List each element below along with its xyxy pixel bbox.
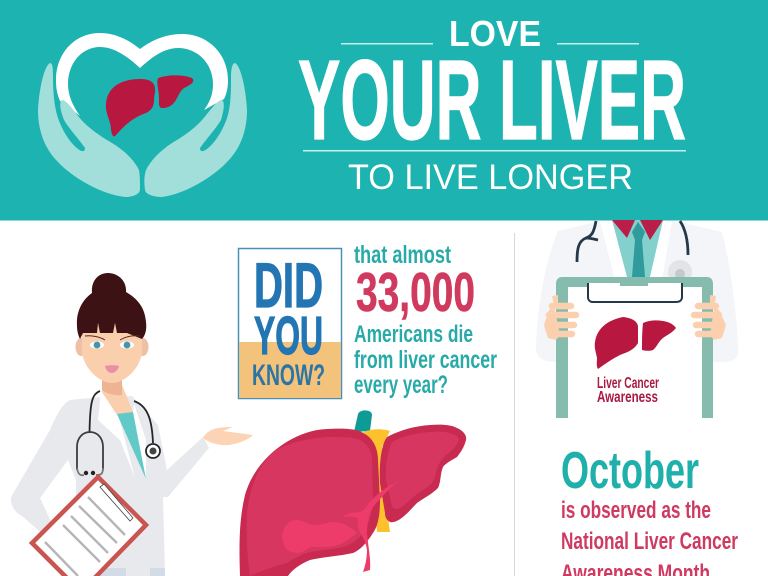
clipboard bbox=[32, 477, 146, 576]
header band bbox=[0, 0, 768, 220]
right lobe bbox=[240, 429, 380, 576]
bile duct yellow bbox=[362, 429, 390, 532]
clipboard bbox=[556, 277, 713, 418]
icon: liver on clipboard bbox=[595, 317, 676, 369]
statistic text: Americans die bbox=[354, 321, 473, 348]
label: Liver Cancer Awareness: Liver Cancer bbox=[597, 375, 659, 392]
subtitle: TO LIVE LONGER: TO LIVE LONGER bbox=[348, 158, 633, 197]
statistic text: from liver cancer bbox=[354, 346, 497, 374]
icon: right hand bbox=[144, 63, 247, 197]
lapels bbox=[98, 391, 135, 478]
large liver illustration bbox=[240, 410, 466, 576]
lips bbox=[105, 365, 119, 373]
33,000: 33,000 bbox=[356, 261, 475, 323]
icon: left hand bbox=[38, 63, 140, 197]
awareness month text bbox=[561, 497, 738, 576]
teal shirt bbox=[117, 412, 146, 479]
statistic text: every year? bbox=[354, 371, 448, 399]
vertical divider bbox=[514, 233, 515, 576]
stethoscope bbox=[90, 391, 153, 443]
did you know box bbox=[238, 248, 342, 398]
face bbox=[82, 325, 142, 383]
female doctor illustration bbox=[11, 273, 253, 576]
gallbladder and vessels bbox=[282, 520, 357, 553]
left lobe bbox=[380, 425, 466, 522]
logo: heart, hands and liver bbox=[38, 33, 247, 197]
eyes bbox=[90, 341, 104, 349]
shirt bbox=[612, 220, 663, 277]
coat bbox=[11, 396, 209, 576]
DID: DID bbox=[254, 251, 323, 321]
tie bbox=[632, 222, 645, 277]
hair bbox=[77, 273, 146, 339]
eyebrows bbox=[85, 336, 140, 340]
statistic text bbox=[354, 241, 497, 399]
icon: heart outline bbox=[56, 33, 228, 116]
hand bbox=[203, 427, 253, 445]
stethoscope bbox=[577, 221, 688, 262]
left hand bbox=[544, 295, 576, 340]
awareness month text: is observed as the bbox=[561, 497, 711, 524]
ears bbox=[76, 338, 86, 356]
YOU: YOU bbox=[254, 306, 323, 366]
coat bbox=[536, 221, 738, 362]
icon: liver bbox=[106, 75, 193, 136]
October heading: October bbox=[561, 442, 699, 500]
trousers bbox=[100, 568, 126, 576]
bow collar bbox=[612, 220, 663, 240]
title: LOVE: LOVE bbox=[449, 13, 541, 54]
statistic text: that almost bbox=[354, 241, 451, 269]
neck bbox=[102, 370, 133, 415]
right hand bbox=[694, 295, 726, 340]
arm notch bbox=[40, 460, 76, 530]
aorta bbox=[354, 410, 372, 432]
KNOW?: KNOW? bbox=[252, 359, 325, 392]
male doctor with clipboard bbox=[536, 220, 738, 418]
male doctor with clipboard: Awareness bbox=[597, 389, 658, 406]
